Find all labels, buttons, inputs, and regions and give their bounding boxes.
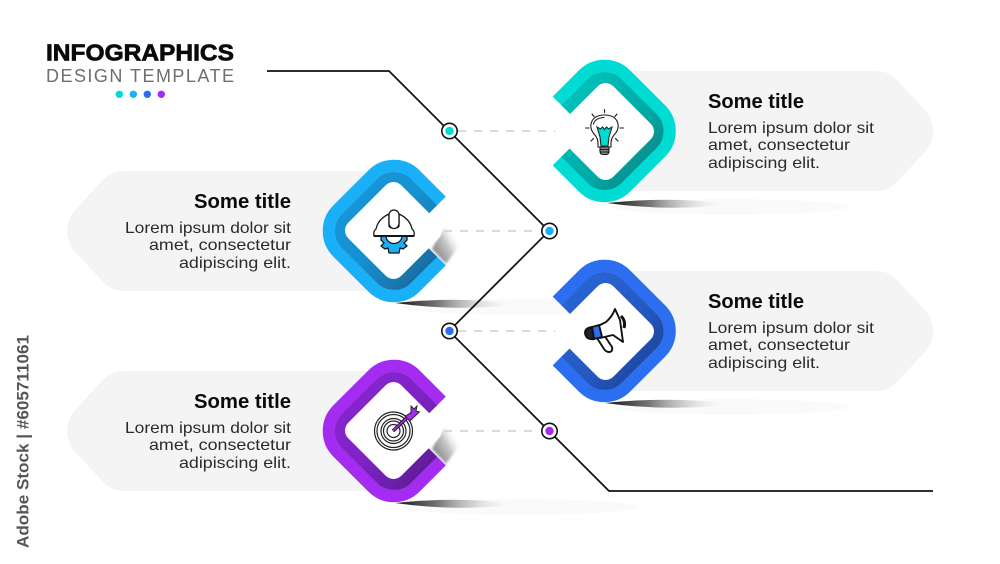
body: Lorem ipsum dolor sit: [125, 420, 292, 437]
dashed connector: step 2: [444, 230, 540, 232]
body: Lorem ipsum dolor sit: [708, 320, 875, 337]
body: amet, consectetur: [708, 137, 851, 154]
icon: safety helmet with gear: [374, 210, 414, 253]
text block: step 4: [125, 391, 292, 472]
body: amet, consectetur: [149, 237, 292, 254]
side credit text: Adobe Stock | #605711061: [14, 335, 32, 548]
ground shadow: step 1: [607, 199, 848, 215]
timeline connector line: [267, 71, 933, 491]
timeline node: step 3: [442, 323, 457, 339]
panel: step 1 background: [620, 71, 933, 191]
timeline node: step 4: [542, 423, 557, 439]
body: adipiscing elit.: [179, 455, 291, 472]
badge: step 3 royal blue: [552, 266, 670, 396]
icon: megaphone: [585, 309, 625, 352]
card shadow: step 2: [432, 228, 460, 264]
dashed connector: step 1: [458, 130, 555, 132]
subheading: DESIGN TEMPLATE: [46, 66, 234, 86]
text block: step 1: [708, 91, 875, 172]
ground shadow: step 2: [395, 299, 638, 315]
body: [708, 320, 875, 372]
panel: step 3 background: [620, 271, 933, 391]
heading: INFOGRAPHICS: [46, 40, 234, 66]
badge: step 4 purple: [329, 366, 441, 496]
body: Lorem ipsum dolor sit: [708, 120, 875, 137]
body: amet, consectetur: [708, 337, 851, 354]
title: Some title: [194, 391, 291, 413]
text block: step 2: [125, 191, 292, 272]
body: Lorem ipsum dolor sit: [125, 220, 292, 237]
body: amet, consectetur: [149, 437, 292, 454]
title block: [46, 40, 234, 98]
body: [125, 220, 292, 272]
dashed connector: step 3: [458, 330, 555, 332]
title: Some title: [708, 91, 804, 113]
body: [708, 120, 875, 172]
white card: step 4: [340, 377, 447, 484]
title: Some title: [194, 191, 291, 213]
body: [125, 420, 292, 472]
badge: step 2 blue: [329, 166, 441, 296]
icon: light bulb: [586, 110, 624, 154]
white card: step 2: [340, 177, 447, 284]
card shadow: step 4: [432, 428, 460, 464]
body: adipiscing elit.: [179, 255, 291, 272]
body: adipiscing elit.: [708, 155, 820, 172]
panel: step 4 background: [67, 371, 380, 491]
badge: step 1 teal: [552, 66, 670, 196]
timeline node: step 2: [542, 223, 557, 239]
text block: step 3: [708, 291, 875, 372]
title: Some title: [708, 291, 804, 313]
ground shadow: step 3: [605, 399, 848, 415]
icon: target with arrow: [374, 406, 420, 450]
colour dots: [116, 91, 165, 98]
ground shadow: step 4: [395, 499, 638, 515]
panel: step 2 background: [67, 171, 380, 291]
timeline node: step 1: [442, 123, 457, 139]
body: adipiscing elit.: [708, 355, 820, 372]
dashed connector: step 4: [444, 430, 540, 432]
